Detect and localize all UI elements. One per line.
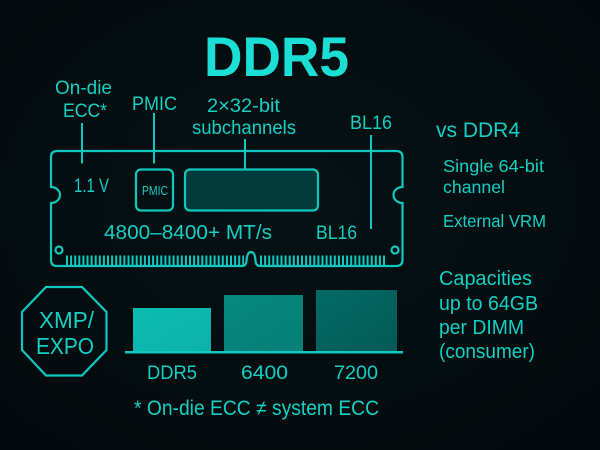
- title: DDR5: [204, 25, 349, 88]
- vs DDR4 heading: vs DDR4: [436, 119, 520, 142]
- XMP/EXPO badge: [22, 287, 106, 376]
- label: BL16 top: BL16: [350, 112, 392, 134]
- capacities note: (consumer): [439, 341, 535, 363]
- label: On-die ECC: [55, 77, 112, 122]
- bar chart: DDR5: [147, 362, 197, 384]
- label: subchannels: [192, 96, 296, 139]
- capacities note: per DIMM: [439, 317, 524, 339]
- bar chart: [125, 290, 403, 384]
- memory module: [51, 113, 402, 266]
- transfer rate label: 4800–8400+ MT/s: [104, 222, 272, 244]
- label: subchannels: 2×32-bit: [207, 96, 281, 117]
- mounting holes: [56, 246, 62, 254]
- DDR4 channel note: [443, 156, 544, 197]
- capacities note: [439, 268, 538, 363]
- bar chart: 6400: [241, 362, 288, 384]
- vs DDR4 panel: [436, 119, 546, 231]
- XMP/EXPO badge: EXPO: [36, 333, 94, 359]
- subchannel chip: [185, 170, 318, 210]
- footnote: * On-die ECC ≠ system ECC: [134, 397, 379, 420]
- label: PMIC: PMIC: [132, 93, 177, 115]
- contact pins: [66, 256, 387, 266]
- label: subchannels: subchannels: [192, 118, 296, 139]
- label: On-die ECC: On-die: [55, 77, 112, 99]
- voltage label: 1.1 V: [74, 176, 109, 197]
- label: On-die ECC: ECC*: [63, 100, 107, 122]
- BL16 module label: BL16: [316, 222, 357, 244]
- bar chart: 7200: [334, 362, 378, 384]
- capacities note: up to 64GB: [439, 293, 538, 315]
- pointer lines: [82, 113, 371, 229]
- capacities note: Capacities: [439, 268, 532, 290]
- DDR4 VRM note: External VRM: [443, 211, 546, 231]
- PMIC chip label: PMIC: [142, 184, 168, 198]
- DDR4 channel note: Single 64-bit: [443, 156, 544, 176]
- PMIC chip: [136, 170, 173, 210]
- DDR4 channel note: channel: [443, 177, 505, 197]
- XMP/EXPO badge: XMP/: [39, 307, 95, 333]
